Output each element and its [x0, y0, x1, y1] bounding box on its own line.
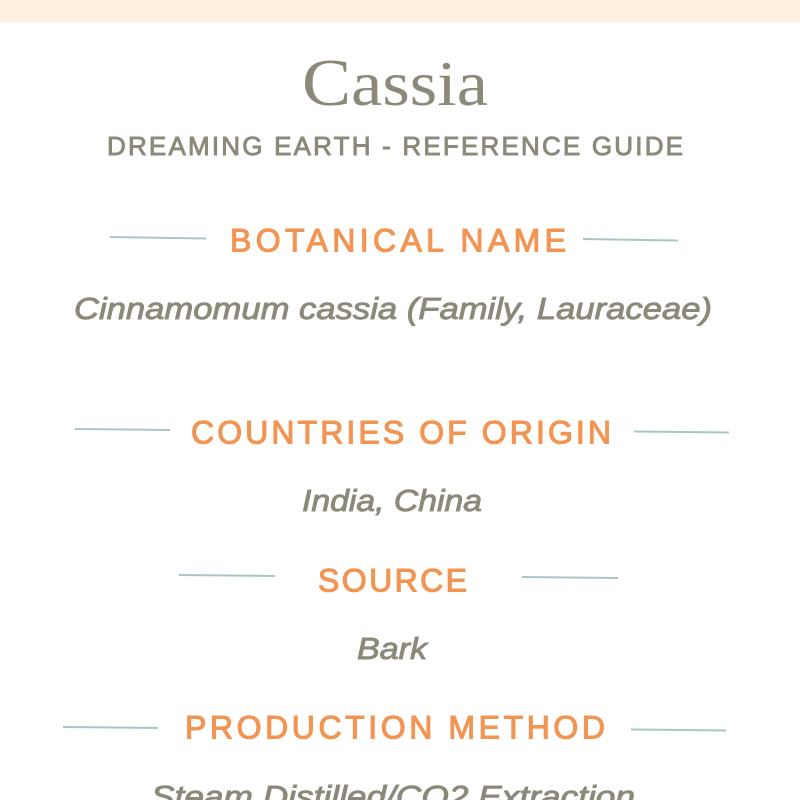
section: production method — [63, 710, 726, 800]
text: botanical name value: Cinnamomum cassia (Family, Lauraceae) — [74, 291, 712, 326]
heading: production method: PRODUCTION METHOD — [185, 710, 605, 746]
subtitle: DREAMING EARTH - REFERENCE GUIDE — [107, 131, 683, 161]
text: source value: Bark — [357, 631, 429, 666]
title: Cassia — [302, 46, 488, 120]
heading: source: SOURCE — [318, 562, 467, 598]
heading: countries of origin: COUNTRIES OF ORIGIN — [191, 414, 611, 450]
section: botanical name — [74, 222, 712, 326]
top banner — [0, 0, 800, 22]
heading: botanical name: BOTANICAL NAME — [230, 222, 566, 258]
text: countries value: India, China — [302, 483, 482, 518]
section: source — [179, 562, 618, 666]
section: countries of origin — [75, 414, 729, 518]
